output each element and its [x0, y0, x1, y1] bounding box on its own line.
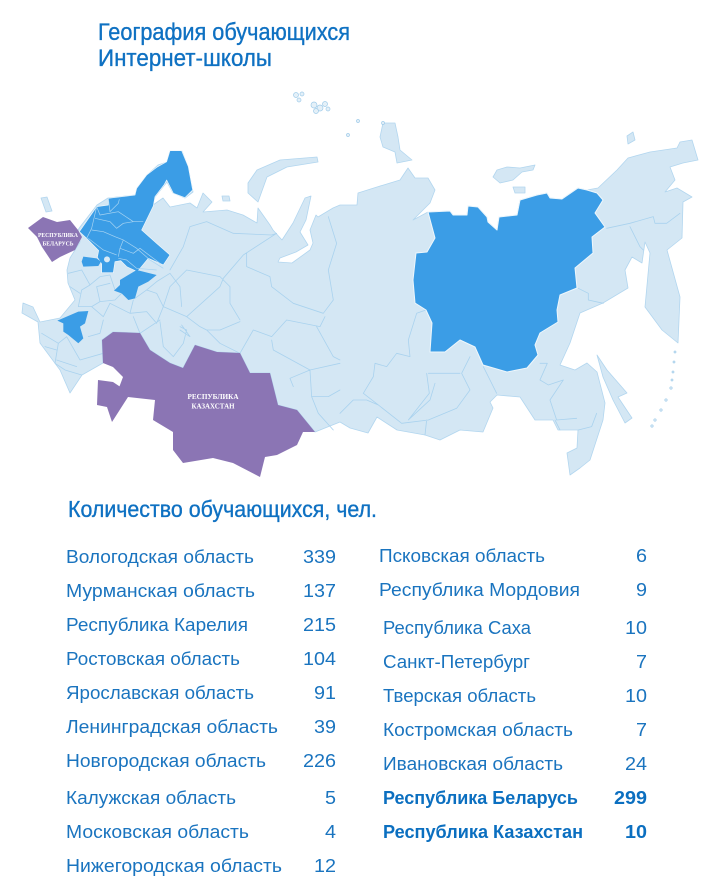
- table: right column: Костромская область: [383, 720, 573, 740]
- table: left column: 137: [303, 581, 336, 601]
- map: Republic of Belarus: БЕЛАРУСЬ: [42, 240, 74, 248]
- table: right column: Тверская область: [383, 686, 536, 706]
- table: right column: Республика Беларусь: [383, 788, 578, 808]
- table: right column: Республика Саха: [383, 618, 532, 638]
- table: left column: Вологодская область: [66, 547, 254, 567]
- table: left column: [66, 547, 336, 876]
- table: left column: 226: [303, 751, 336, 771]
- table: left column: 12: [314, 856, 336, 876]
- table: left column: 104: [303, 649, 336, 669]
- table: left column: Ростовская область: [66, 649, 240, 669]
- table: right column: 7: [636, 652, 647, 672]
- table: left column: Республика Карелия: [66, 615, 248, 635]
- table: right column: [379, 546, 647, 842]
- table: right column: 10: [625, 686, 647, 706]
- table: left column: 339: [303, 547, 336, 567]
- table: right column: 10: [625, 822, 647, 842]
- table: right column: Псковская область: [379, 546, 545, 566]
- map: Republic of Belarus: [28, 217, 82, 262]
- map: Republic of Belarus: РЕСПУБЛИКА: [38, 232, 78, 239]
- map of regions: [22, 92, 698, 477]
- table: right column: 10: [625, 618, 647, 638]
- table: left column: 215: [303, 615, 336, 635]
- table: left column: Калужская область: [66, 788, 236, 808]
- map: borders inside highlighted regions: [87, 198, 163, 270]
- map: Rostov region: [57, 311, 88, 343]
- map: Republic of Kazakhstan: РЕСПУБЛИКА: [188, 392, 239, 401]
- table: left column: 39: [314, 717, 336, 737]
- title: География обучающихся: [98, 19, 350, 46]
- table: right column: 7: [636, 720, 647, 740]
- table: right column: 299: [614, 788, 647, 808]
- table: right column: 9: [636, 580, 647, 600]
- map: highlighted north-west regions: [57, 151, 193, 343]
- table: left column: 5: [325, 788, 336, 808]
- table: left column: Мурманская область: [66, 581, 255, 601]
- table: left column: Новгородская область: [66, 751, 266, 771]
- map: Republic of Kazakhstan: [97, 332, 315, 477]
- table: right column: Республика Мордовия: [379, 580, 580, 600]
- table: left column: Нижегородская область: [66, 856, 282, 876]
- map: Republic of Kazakhstan: КАЗАХСТАН: [192, 402, 235, 410]
- map: small northern islands: [294, 92, 676, 427]
- title: Интернет-школы: [98, 45, 272, 72]
- title: [98, 19, 350, 72]
- table: right column: Санкт-Петербург: [383, 652, 530, 672]
- map: western regional borders: [42, 217, 340, 430]
- table: left column: Ярославская область: [66, 683, 254, 703]
- table: right column: 24: [625, 754, 647, 774]
- map: eastern regional borders: [340, 213, 680, 435]
- table: right column: 6: [636, 546, 647, 566]
- table: right column: Ивановская область: [383, 754, 563, 774]
- subheading: Количество обучающихся, чел.: [68, 496, 377, 522]
- table: right column: Республика Казахстан: [383, 822, 583, 842]
- table: left column: Московская область: [66, 822, 249, 842]
- table: left column: 4: [325, 822, 336, 842]
- table: left column: Ленинградская область: [66, 717, 278, 737]
- table: left column: 91: [314, 683, 336, 703]
- map: highlighted Sakha Republic: [413, 188, 605, 372]
- map: Russia land mass: [22, 123, 698, 475]
